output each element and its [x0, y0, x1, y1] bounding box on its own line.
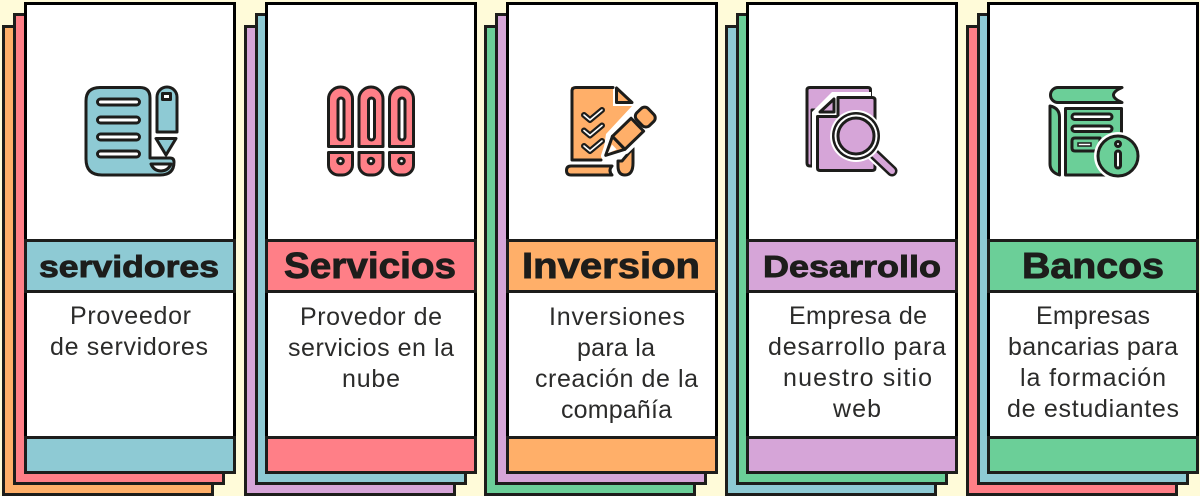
- text: bancos description: [1007, 302, 1179, 423]
- panel: inversion: [486, 4, 716, 494]
- text: inversion description: [535, 303, 698, 424]
- icon: checklist and pencil: [566, 87, 658, 175]
- panel: bancos: [968, 4, 1198, 494]
- icon: binders: [328, 87, 414, 175]
- text: desarrollo description: desarrollo para: [768, 333, 946, 361]
- text: inversion description: para la: [577, 334, 655, 362]
- text: servidores description: de servidores: [50, 333, 208, 361]
- icon: book with info badge: [1050, 88, 1142, 180]
- text: servicios description: nube: [342, 365, 400, 393]
- text: bancos description: de estudiantes: [1007, 395, 1179, 423]
- panel: desarrollo: [726, 4, 956, 494]
- text: desarrollo description: [768, 302, 946, 423]
- heading: Bancos: Bancos: [1022, 245, 1164, 286]
- text: inversion description: creación de la: [535, 365, 698, 393]
- text: desarrollo description: Empresa de: [789, 302, 927, 330]
- text: servidores description: [50, 302, 208, 361]
- text: desarrollo description: web: [832, 395, 881, 423]
- heading: Servicios: Servicios: [284, 245, 456, 286]
- heading: Desarrollo: Desarrollo: [763, 249, 941, 284]
- text: servicios description: servicios en la: [288, 334, 454, 362]
- icon: documents and magnifier: [807, 88, 892, 171]
- text: servicios description: [288, 303, 454, 393]
- text: servidores description: Proveedor: [70, 302, 191, 330]
- text: bancos description: bancarias para: [1008, 333, 1178, 361]
- text: servicios description: Provedor de: [300, 303, 442, 331]
- panel: servicios: [246, 4, 476, 494]
- panel: servidores: [4, 4, 234, 494]
- text: bancos description: Empresas: [1036, 302, 1150, 330]
- heading: Inversion: Inversion: [522, 245, 700, 286]
- text: inversion description: Inversiones: [549, 303, 685, 331]
- heading: servidores: servidores: [39, 249, 219, 284]
- text: inversion description: compañía: [561, 396, 672, 424]
- text: desarrollo description: nuestro sitio: [783, 364, 932, 392]
- text: bancos description: la formación: [1020, 364, 1166, 392]
- icon: document and pen: [86, 87, 177, 175]
